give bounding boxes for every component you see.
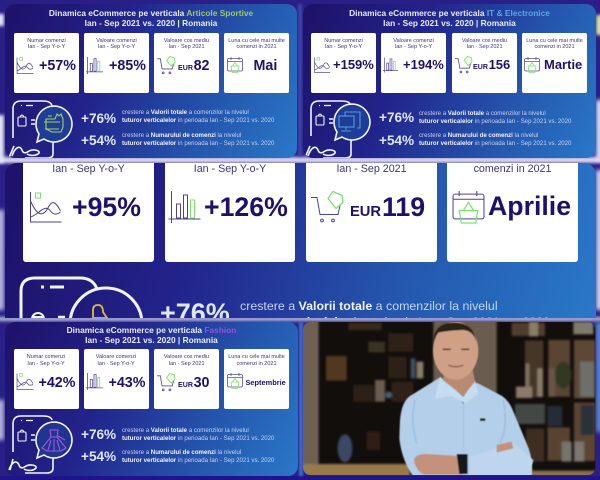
- icon: line chart: [30, 192, 62, 222]
- icon: bar chart: [86, 373, 103, 390]
- card: valoare cos mediu: [306, 159, 437, 262]
- card: numar comenzi: Numar comenzi: [324, 38, 363, 44]
- value: +194%: [403, 57, 444, 72]
- shirt: [399, 377, 532, 477]
- icon: phone with dress: [8, 415, 73, 474]
- value: EUR82: [178, 58, 209, 74]
- icon: phone with computer: [306, 100, 371, 158]
- value: Mai: [254, 58, 277, 74]
- heading: Dinamica eCommerce pe verticala IT & Electronice: [349, 8, 550, 18]
- card: numar comenzi: Ian - Sep Y-o-Y: [27, 361, 65, 367]
- text: numar comenzi: tuturor verticalelor in perioada Ian - Sep 2021 vs. 2020: [122, 457, 274, 464]
- card: luna: comenzi in 2021: [236, 44, 277, 50]
- card: numar comenzi: [311, 32, 376, 92]
- icon: line chart: [314, 57, 330, 73]
- icon: line chart: [16, 373, 34, 390]
- heading: Ian - Sep 2021 vs. 2020 | Romania: [383, 18, 516, 28]
- icon: cart: [157, 56, 176, 74]
- heading: Dinamica eCommerce pe verticala Fashion: [67, 325, 236, 335]
- card: valoare comenzi: Ian - Sep Y-o-Y: [395, 44, 432, 50]
- text: valoare totala: [122, 427, 274, 442]
- icon: bar chart: [383, 58, 398, 72]
- card: numar comenzi: Ian - Sep Y-o-Y: [325, 44, 362, 50]
- text: valoare totala: [122, 109, 274, 124]
- value: +85%: [109, 58, 146, 74]
- panel: Articole Sportive: [5, 4, 297, 158]
- text: valoare totala: tuturor verticalelor in perioada Ian - Sep 2021 vs. 2020: [122, 435, 274, 442]
- value: Septembrie: [246, 378, 286, 387]
- value: +95%: [72, 192, 141, 222]
- panel: IT & Electronice: [303, 4, 596, 158]
- text: valoare totala: tuturor verticalelor in perioada Ian - Sep 2021 vs. 2020: [419, 118, 571, 124]
- card: numar comenzi: [23, 159, 154, 262]
- stat: +76%: +76%: [81, 110, 116, 126]
- card: luna: Luna cu cele mai multe: [526, 38, 583, 44]
- card: valoare cos mediu: [452, 32, 517, 92]
- text: numar comenzi: crestere a Numarului de comenzi la nivelul: [419, 132, 538, 139]
- value: EUR119: [350, 192, 425, 222]
- card: luna: [522, 32, 587, 92]
- card: luna: [224, 32, 289, 92]
- watch: [457, 454, 468, 474]
- card: valoare comenzi: [165, 159, 295, 262]
- card: numar comenzi: Numar comenzi: [27, 38, 66, 44]
- card: valoare cos mediu: Valoare cos mediu: [164, 38, 209, 44]
- heading: [349, 8, 550, 28]
- card: luna: comenzi in 2021: [474, 163, 551, 175]
- card: luna: Luna cu cele mai multe: [228, 38, 285, 44]
- card: valoare comenzi: [84, 349, 148, 409]
- stat: +54%: +54%: [81, 132, 116, 148]
- card: valoare cos mediu: [154, 349, 219, 409]
- value: EUR156: [473, 57, 510, 72]
- text: numar comenzi: crestere a Numarului de comenzi la nivelul: [122, 132, 241, 139]
- stat: +54%: +54%: [379, 132, 414, 148]
- card: luna: [447, 159, 578, 262]
- arm and hands: [414, 454, 467, 475]
- text: numar comenzi: [122, 132, 274, 147]
- text: numar comenzi: tuturor verticalelor in perioada Ian - Sep 2021 vs. 2020: [122, 140, 274, 147]
- card: valoare cos mediu: Valoare cos mediu: [462, 38, 507, 44]
- heading: [67, 325, 236, 345]
- card: numar comenzi: Ian - Sep Y-o-Y: [28, 44, 65, 50]
- icon: cart: [455, 56, 472, 74]
- value: EUR30: [178, 375, 209, 391]
- card: valoare cos mediu: Ian - Sep 2021: [168, 44, 205, 50]
- text: valoare totala: crestere a Valorii totale a comenzilor la nivelul: [122, 427, 249, 434]
- card: valoare comenzi: Valoare comenzi: [96, 38, 137, 44]
- heading: Ian - Sep 2021 vs. 2020 | Romania: [85, 18, 217, 28]
- icon: phone with bell: [20, 276, 143, 318]
- card: valoare comenzi: Valoare comenzi: [96, 354, 136, 360]
- card: luna: comenzi in 2021: [236, 361, 277, 367]
- stat: +54%: +54%: [81, 448, 116, 464]
- card: numar comenzi: Numar comenzi: [27, 354, 65, 360]
- photo: portrait of a man in a blue shirt: [303, 322, 596, 475]
- value: Martie: [544, 57, 582, 72]
- card: luna: comenzi in 2021: [534, 44, 575, 50]
- value: +42%: [38, 375, 75, 391]
- text: valoare totala: [419, 110, 572, 124]
- icon: calendar: [524, 57, 540, 73]
- card: luna: Luna cu cele mai multe: [228, 354, 285, 360]
- card: valoare cos mediu: Ian - Sep 2021: [336, 163, 407, 175]
- head: [433, 322, 478, 380]
- card: valoare comenzi: [84, 32, 149, 92]
- text: valoare totala: [240, 299, 550, 318]
- text: numar comenzi: [419, 132, 572, 147]
- card: valoare comenzi: Valoare comenzi: [393, 38, 434, 44]
- heading: [49, 8, 253, 28]
- text: valoare totala: crestere a Valorii totale a comenzilor la nivelul: [122, 109, 249, 116]
- card: valoare comenzi: Ian - Sep Y-o-Y: [98, 44, 135, 50]
- text: valoare totala: crestere a Valorii totale a comenzilor la nivelul: [419, 110, 546, 116]
- card: numar comenzi: Ian - Sep Y-o-Y: [52, 163, 125, 175]
- icon: cart: [311, 190, 344, 222]
- stat: +76%: +76%: [81, 426, 116, 442]
- heading: Ian - Sep 2021 vs. 2020 | Romania: [85, 335, 218, 345]
- icon: calendar: [452, 191, 484, 224]
- icon: phone with sports goods: [8, 100, 73, 158]
- card: numar comenzi: [14, 32, 79, 92]
- text: valoare totala: crestere a Valorii totale a comenzilor la nivelul: [240, 299, 498, 313]
- card: valoare cos mediu: Ian - Sep 2021: [466, 44, 503, 50]
- value: +159%: [333, 57, 374, 72]
- heading: Dinamica eCommerce pe verticala Articole Sportive: [49, 8, 253, 18]
- stat: +76%: +76%: [379, 110, 414, 125]
- card: valoare comenzi: [381, 32, 446, 92]
- value: +43%: [108, 375, 145, 391]
- text: valoare totala: tuturor verticalelor in perioada Ian - Sep 2021 vs. 2020: [122, 117, 274, 124]
- icon: bar chart: [86, 57, 103, 74]
- icon: bar chart: [168, 191, 200, 223]
- card: valoare comenzi: Ian - Sep Y-o-Y: [194, 163, 266, 175]
- icon: calendar: [227, 373, 243, 389]
- panel: Fashion: [5, 322, 298, 476]
- card: valoare cos mediu: Ian - Sep 2021: [168, 361, 205, 367]
- icon: cart: [157, 373, 176, 392]
- text: numar comenzi: [122, 449, 274, 464]
- card: numar comenzi: [14, 349, 78, 409]
- icon: line chart: [16, 57, 34, 74]
- icon: calendar: [227, 57, 243, 73]
- card: luna: [224, 349, 289, 409]
- text: numar comenzi: tuturor verticalelor in perioada Ian - Sep 2021 vs. 2020: [419, 140, 571, 147]
- card: valoare cos mediu: Valoare cos mediu: [164, 354, 209, 360]
- text: numar comenzi: crestere a Numarului de comenzi la nivelul: [122, 449, 241, 456]
- value: +126%: [204, 192, 288, 222]
- card: valoare cos mediu: [154, 32, 219, 92]
- value: Aprilie: [488, 191, 571, 221]
- card: valoare comenzi: Ian - Sep Y-o-Y: [97, 361, 135, 367]
- neck: [443, 370, 475, 396]
- value: +57%: [39, 58, 76, 74]
- panel: zoomed overall panel: [5, 163, 596, 318]
